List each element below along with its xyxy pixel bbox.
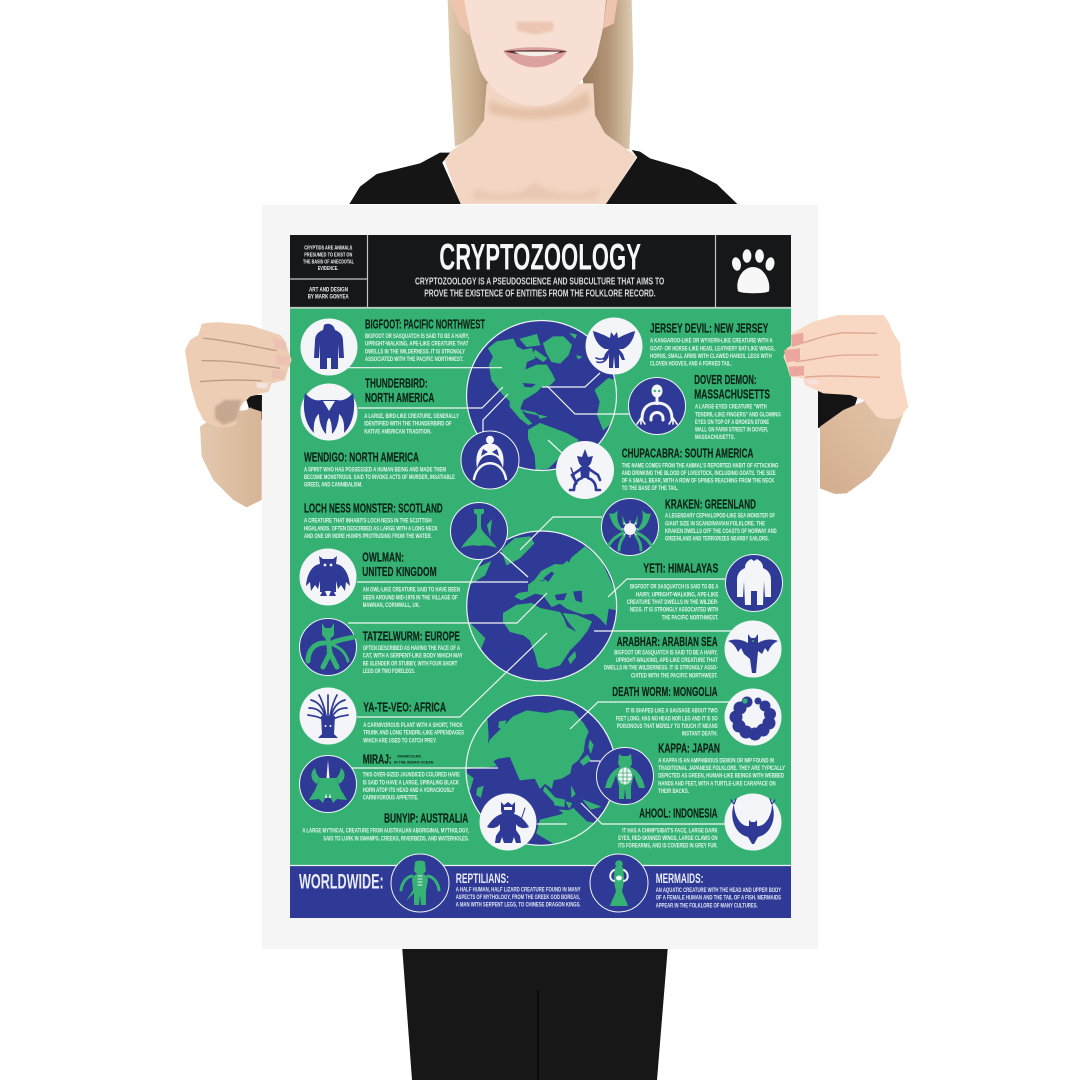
Reptilians heading: REPTILIANS:	[456, 871, 509, 886]
creature: Bigfoot	[300, 317, 485, 376]
icon: Yeti	[726, 554, 782, 612]
description: DWELLS IN THE WILDERNESS. IT IS STRONGLY	[365, 349, 466, 356]
icon: Death Worm	[724, 688, 782, 746]
icon: Bigfoot	[300, 318, 358, 376]
description	[364, 413, 460, 435]
description: HANDS AND FEET, WITH A TURTLE-LIKE CARAPACE ON	[658, 780, 776, 787]
description: POISONOUS THAT MERELY TO TOUCH IT MEANS	[617, 723, 718, 730]
description: BE SLENDER OR STUBBY, WITH FOUR SHORT	[363, 660, 458, 667]
subtitle: CRYPTOZOOLOGY IS A PSEUDOSCIENCE AND SUBCULTURE THAT AIMS TO	[415, 276, 664, 288]
Reptilians description: A HALF HUMAN, HALF LIZARD CREATURE FOUND IN MANY	[456, 886, 581, 893]
description	[650, 338, 775, 368]
subtitle	[415, 276, 664, 299]
heading: OWLMAN:	[362, 549, 404, 564]
icon: Bunyip	[480, 794, 536, 850]
creature: Ya-Te-Veo	[300, 688, 464, 744]
heading: KRAKEN: GREENLAND	[665, 496, 756, 511]
heading: TATZELWURM: EUROPE	[363, 628, 460, 643]
header note: credit: ART AND DESIGN	[309, 287, 348, 293]
Reptilians description	[456, 886, 581, 909]
description	[363, 722, 464, 744]
connector lines	[348, 368, 742, 824]
description	[604, 649, 718, 679]
creature: Chupacabra	[556, 441, 779, 499]
heading: DEATH WORM: MONGOLIA	[612, 684, 718, 699]
description: NATIVE AMERICAN TRADITION.	[364, 428, 432, 435]
description	[304, 518, 438, 540]
description	[363, 645, 463, 675]
creature: Bunyip	[302, 794, 536, 850]
Mermaids description: APPEAR IN THE FOLKLORE OF MANY CULTURES.	[656, 902, 758, 909]
globe: Asia and Australia	[460, 695, 616, 845]
icon: Arabhar	[724, 620, 782, 678]
heading: THUNDERBIRD:	[365, 375, 428, 390]
description: MAWNAN, CORNWALL, UK.	[363, 602, 420, 609]
description: THIS OVER-SIZED JAUNDICED COLORED HARE	[363, 772, 460, 779]
heading: YA-TE-VEO: AFRICA	[363, 699, 446, 714]
worldwide heading: WORLDWIDE:	[299, 870, 384, 893]
icon: Ahool	[724, 794, 782, 850]
description: A KANGAROO-LIKE OR WYVERN-LIKE CREATURE WITH A	[650, 338, 773, 345]
description: CLOVEN HOOVES, AND A FORKED TAIL.	[650, 361, 732, 368]
icon: Jersey Devil	[586, 318, 642, 374]
person: right hand and arm	[783, 315, 908, 494]
location note	[394, 753, 433, 764]
Mermaids heading: MERMAIDS:	[656, 871, 703, 886]
subtitle: PROVE THE EXISTENCE OF ENTITIES FROM THE FOLKLORE RECORD.	[424, 288, 656, 299]
description: OF A SMALL BEAR, WITH A ROW OF SPINES REACHING FROM THE NECK	[622, 478, 775, 485]
icon: Chupacabra	[556, 441, 614, 499]
description: GREED, AND CANNIBALISM.	[304, 482, 362, 489]
description: TO THE BASE OF THE TAIL.	[622, 485, 679, 492]
icon: Mermaid	[590, 854, 648, 912]
description: WALL ON FARM STREET IN DOVER,	[695, 427, 768, 434]
description	[363, 772, 460, 802]
description	[695, 404, 781, 441]
description: BIGFOOT OR SASQUATCH IS SAID TO BE A HAIRY,	[614, 649, 718, 656]
heading: JERSEY DEVIL: NEW JERSEY	[650, 321, 769, 336]
description: THE NAME COMES FROM THE ANIMAL'S REPORTED HABIT OF ATTACKING	[622, 462, 779, 469]
description: BIGFOOT OR SASQUATCH IS SAID TO BE A	[630, 584, 719, 591]
description: CAT, WITH A SERPENT-LIKE BODY WHICH MAY	[363, 653, 463, 660]
description: AND DRINKING THE BLOOD OF LIVESTOCK, INCLUDING GOATS. THE SIZE	[622, 470, 776, 477]
description: TRUNK AND LONG TENDRIL-LIKE APPENDAGES	[363, 730, 464, 737]
description: A LEGENDARY CEPHALOPOD-LIKE SEA MONSTER OF	[665, 513, 775, 520]
heading	[365, 375, 435, 405]
description: DWELLS IN THE WILDERNESS. IT IS STRONGLY ASSO-	[604, 665, 718, 672]
header note: cryptids definition	[303, 245, 354, 272]
header note: cryptids definition: PRESUMED TO EXIST ON	[304, 252, 353, 258]
worldwide band	[290, 854, 791, 918]
description: NESS. IT IS STRONGLY ASSOCIATED WITH	[630, 607, 719, 614]
description: MASSACHUSETTS.	[695, 434, 735, 441]
creature: Arabhar	[604, 620, 782, 679]
Reptilians description: A MAN WITH SERPENT LEGS, TO CHINESE DRAGON KINGS.	[456, 902, 581, 909]
description: EYES ON TOP OF A BROKEN STONE	[695, 419, 769, 426]
description	[627, 584, 719, 621]
description: AN OWL-LIKE CREATURE SAID TO HAVE BEEN	[363, 587, 460, 594]
creature: Miraj	[300, 751, 460, 812]
description: UPRIGHT-WALKING, APE-LIKE CREATURE THAT	[365, 341, 468, 348]
description: UPRIGHT-WALKING, APE-LIKE CREATURE THAT	[616, 657, 718, 664]
description: LEGS OR TWO FORELEGS.	[363, 668, 415, 675]
description: GOAT- OR HORSE-LIKE HEAD, LEATHERY BAT-LIKE WINGS,	[650, 345, 775, 352]
Reptilians description: ASPECTS OF MYTHOLOGY, FROM THE GREEK GOD BOREAS,	[456, 894, 580, 901]
smile	[503, 47, 567, 67]
description: A SPIRIT WHO HAS POSSESSED A HUMAN BEING AND MADE THEM	[304, 466, 446, 473]
description: AND ONE OR MORE HUMPS PROTRUDING FROM THE WATER.	[304, 533, 432, 540]
icon: Tatzelwurm	[300, 618, 356, 676]
description	[304, 466, 455, 489]
description: HORN ATOP ITS HEAD AND A VORACIOUSLY	[363, 787, 455, 794]
description: A LARGE, BIRD-LIKE CREATURE, GENERALLY	[364, 413, 460, 420]
heading: BUNYIP: AUSTRALIA	[384, 811, 469, 826]
description: WHICH ARE USED TO CATCH PREY.	[363, 737, 437, 744]
description: A LARGE MYTHICAL CREATURE FROM AUSTRALIAN ABORIGINAL MYTHOLOGY,	[302, 828, 469, 835]
heading: MIRAJ:	[363, 751, 392, 766]
header note: credit: BY MARK GONYEA	[308, 295, 349, 301]
description: FEET LONG, HAS NO HEAD NOR LEG AND IT IS SO	[616, 715, 718, 722]
creature: Loch Ness Monster	[304, 501, 508, 560]
heading	[694, 372, 770, 401]
description: GREENLAND AND TERRORIZES NEARBY SAILORS.	[665, 536, 769, 543]
header note: cryptids definition: EVIDENCE.	[318, 266, 339, 272]
icon: Wendigo	[461, 431, 519, 489]
description: EYES, RED-SKINNED WINGS, LARGE CLAWS ON	[618, 835, 718, 842]
person: leggings	[402, 945, 668, 1080]
location note: IN THE INDIAN OCEAN	[394, 759, 433, 764]
person: sleeves behind poster	[245, 390, 860, 430]
creature: Thunderbird	[300, 375, 460, 440]
creature: Wendigo	[304, 431, 519, 489]
heading: YETI: HIMALAYAS	[643, 561, 719, 576]
title: CRYPTOZOOLOGY	[439, 236, 641, 278]
creature: Kraken	[602, 496, 777, 556]
description	[363, 587, 460, 609]
description	[302, 828, 469, 842]
description	[665, 513, 777, 543]
description: IS SAID TO HAVE A LARGE, SPIRALING BLACK	[363, 779, 459, 786]
creature: Tatzelwurm	[300, 618, 463, 676]
heading: ARABHAR: ARABIAN SEA	[617, 634, 718, 649]
header note: cryptids definition: THE BASIS OF ANECDOTAL	[303, 259, 354, 265]
heading: UNITED KINGDOM	[362, 564, 437, 579]
description: SAID TO LURK IN SWAMPS, CREEKS, RIVERBEDS, AND WATERHOLES.	[323, 835, 469, 842]
description: IT IS SHAPED LIKE A SAUSAGE ABOUT TWO	[626, 708, 718, 715]
description	[622, 462, 779, 492]
description	[618, 827, 718, 850]
description: SEEN AROUND MID-1976 IN THE VILLAGE OF	[363, 594, 458, 601]
description: HORNS, SMALL ARMS WITH CLAWED HANDS, LEGS WITH	[650, 353, 772, 360]
description	[365, 333, 469, 363]
icon: paw print	[731, 249, 776, 293]
description: TENDRIL-LIKE FINGERS" AND GLOWING	[695, 411, 781, 418]
header note: credit	[308, 287, 349, 301]
header bar	[290, 235, 791, 308]
description: A LARGE-EYED CREATURE "WITH	[695, 404, 767, 411]
description: CREATURE THAT DWELLS IN THE WILDER-	[627, 599, 718, 606]
heading: NORTH AMERICA	[365, 390, 435, 405]
description: INSTANT DEATH.	[682, 731, 718, 738]
description: DEPICTED AS GREEN, HUMAN-LIKE BEINGS WITH WEBBED	[658, 773, 784, 780]
description: GIANT SIZE IN SCANDINAVIAN FOLKLORE. THE	[665, 520, 765, 527]
creature: Kappa	[596, 741, 786, 804]
description: THE PACIFIC NORTHWEST.	[662, 614, 719, 621]
description: IDENTIFIED WITH THE THUNDERBIRD OF	[364, 421, 452, 428]
poster sheet	[262, 205, 818, 949]
icon: Loch Ness Monster	[450, 502, 508, 560]
icon: Miraj	[300, 756, 356, 812]
description: KRAKEN DWELLS OFF THE COASTS OF NORWAY AND	[665, 528, 777, 535]
description: A KAPPA IS AN AMPHIBIOUS DEMON OR IMP FOUND IN	[658, 757, 774, 764]
creature: Ahool	[618, 794, 782, 850]
icon: Reptilian	[391, 854, 449, 912]
description: A CREATURE THAT INHABITS LOCH NESS IN THE SCOTTISH	[304, 518, 432, 525]
description: HAIRY, UPRIGHT-WALKING, APE-LIKE	[636, 591, 718, 598]
person: head, neck and shirt	[349, 0, 737, 204]
location note: UNNAMED ISLAND	[397, 753, 421, 758]
header note: cryptids definition: CRYPTIDS ARE ANIMALS	[304, 245, 353, 251]
creature: Dover Demon	[628, 372, 781, 441]
heading: AHOOL: INDONESIA	[639, 806, 718, 821]
description: THEIR BACKS.	[658, 788, 689, 795]
description: CARNIVOROUS APPETITE.	[363, 795, 419, 802]
icon: Owlman	[300, 548, 356, 606]
description: IT HAS A CHIMP'S/BAT'S FACE, LARGE DARK	[622, 827, 718, 834]
heading: CHUPACABRA: SOUTH AMERICA	[622, 445, 754, 460]
heading: LOCH NESS MONSTER: SCOTLAND	[304, 501, 443, 516]
creature: Yeti	[627, 554, 782, 621]
description	[658, 757, 786, 795]
icon: Ya-Te-Veo	[300, 688, 356, 744]
heading	[362, 549, 437, 579]
description	[616, 708, 718, 738]
heading: BIGFOOT: PACIFIC NORTHWEST	[365, 317, 485, 332]
description: BECOME MONSTROUS. SAID TO INVOKE ACTS OF MURDER, INSATIABLE	[304, 474, 455, 481]
creature: Owlman	[300, 548, 460, 609]
icon: Thunderbird	[300, 384, 358, 440]
description: ITS FOREARMS, AND IS COVERED IN GREY FUR.	[618, 843, 718, 850]
black shirt	[349, 150, 737, 204]
icon: Kraken	[602, 498, 658, 556]
creature: Death Worm	[612, 684, 782, 746]
icon: Dover Demon	[628, 378, 686, 434]
heading: MASSACHUSETTS	[694, 386, 770, 401]
green main panel	[290, 308, 791, 866]
person: left hand and arm	[185, 322, 292, 507]
creature: Jersey Devil	[586, 318, 775, 374]
heading: KAPPA: JAPAN	[658, 741, 720, 756]
icon: Kappa	[596, 748, 654, 804]
heading: DOVER DEMON:	[694, 372, 757, 387]
Mermaids description: AN AQUATIC CREATURE WITH THE HEAD AND UPPER BODY	[656, 887, 782, 894]
heading: WENDIGO: NORTH AMERICA	[304, 449, 419, 464]
description: A CARNIVOROUS PLANT WITH A SHORT, THICK	[363, 722, 463, 729]
description: BIGFOOT OR SASQUATCH IS SAID TO BE A HAIRY,	[365, 333, 469, 340]
description: OFTEN DESCRIBED AS HAVING THE FACE OF A	[363, 645, 460, 652]
description: TRADITIONAL JAPANESE FOLKLORE. THEY ARE TYPICALLY	[658, 765, 786, 772]
Mermaids description: OF A FEMALE HUMAN AND THE TAIL OF A FISH. MERMAIDS	[656, 895, 781, 902]
description: CIATED WITH THE PACIFIC NORTHWEST.	[631, 672, 718, 679]
Mermaids description	[656, 887, 782, 909]
globe: Europe and Africa	[460, 531, 620, 681]
globe: Americas	[466, 320, 620, 470]
description: ASSOCIATED WITH THE PACIFIC NORTHWEST.	[365, 356, 463, 363]
description: HIGHLANDS. OFTEN DESCRIBED AS LARGE WITH A LONG NECK	[304, 525, 438, 532]
